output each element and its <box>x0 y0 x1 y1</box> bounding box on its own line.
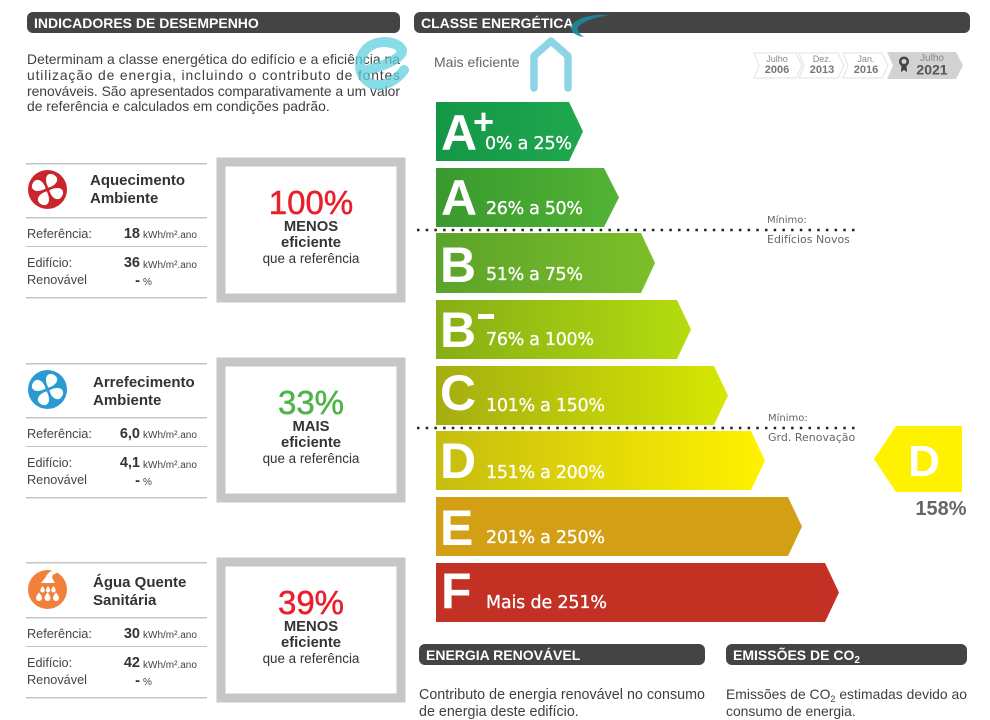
bar: F: F <box>441 563 472 619</box>
panel: arrefecimento ambiente: - <box>135 473 140 489</box>
energy scale bars <box>436 101 839 622</box>
text: energia renovável <box>419 687 705 720</box>
text: emissões de CO2: 2 <box>830 694 835 704</box>
callout: 33% mais eficiente: 33% <box>278 384 344 421</box>
callout: 33% mais eficiente: MAIS <box>292 419 330 435</box>
bar: D: D <box>440 433 476 489</box>
callout: 100% menos eficiente: que a referência <box>263 251 360 266</box>
callout: 33% mais eficiente: eficiente <box>281 435 341 451</box>
panel: água quente sanitária: Água Quente <box>93 574 186 591</box>
label: mínimo grd. renovação: Grd. Renovação <box>768 431 855 444</box>
panel: aquecimento ambiente: Ambiente <box>90 190 158 207</box>
bar: E: 201% a 250% <box>486 528 605 548</box>
panel: água quente sanitária: kWh/m².ano <box>143 660 197 671</box>
bar: B-: 76% a 100% <box>486 330 594 350</box>
callout: 100% menos eficiente: MENOS <box>284 219 338 235</box>
heading: emissões de CO2: EMISSÕES DE CO <box>733 647 854 663</box>
bar: A+: A <box>441 105 477 161</box>
panel: aquecimento ambiente: Edifício: <box>27 256 72 270</box>
icon: red fan <box>28 170 67 209</box>
panel: água quente sanitária: Renovável <box>27 673 87 687</box>
panel: aquecimento ambiente: Referência: <box>27 227 92 241</box>
callout: 100% menos eficiente <box>221 162 401 298</box>
heading: emissões de CO2: 2 <box>854 655 860 666</box>
panel: água quente sanitária <box>26 562 207 698</box>
panel: aquecimento ambiente: - <box>135 273 140 289</box>
watermark: house outline <box>534 41 568 88</box>
callout: 39% menos eficiente: 39% <box>278 584 344 621</box>
panel: aquecimento ambiente: Aquecimento <box>90 172 185 189</box>
bar: A+ <box>436 101 583 161</box>
label: mais eficiente: Mais eficiente <box>434 54 520 70</box>
heading: energia renovável <box>419 644 705 665</box>
panel: arrefecimento ambiente: Renovável <box>27 473 87 487</box>
panel: água quente sanitária: Edifício: <box>27 656 72 670</box>
bar: A: A <box>441 170 477 226</box>
panel: aquecimento ambiente: 18 <box>124 226 140 242</box>
bar: B-: B <box>440 302 476 358</box>
text: energia renovável: de energia deste edifício. <box>419 704 579 720</box>
bar: B: 51% a 75% <box>486 265 583 285</box>
timeline step: julho 2021 current: 2021 <box>916 62 948 78</box>
watermark: teal swoosh <box>571 15 610 37</box>
bar: A+: + <box>473 101 494 142</box>
panel: aquecimento ambiente: kWh/m².ano <box>143 230 197 241</box>
panel: água quente sanitária: 30 <box>124 626 140 642</box>
panel: água quente sanitária: kWh/m².ano <box>143 630 197 641</box>
heading: classe energética <box>414 12 970 33</box>
icon: blue fan <box>28 370 67 409</box>
panel: arrefecimento ambiente: 6,0 <box>120 426 140 442</box>
label: mínimo grd. renovação: Mínimo: <box>768 412 808 424</box>
callout: 39% menos eficiente: MENOS <box>284 619 338 635</box>
callout: 39% menos eficiente: que a referência <box>263 651 360 666</box>
label: mínimo grd. renovação <box>768 412 855 444</box>
bar: B- <box>436 300 691 359</box>
panel: arrefecimento ambiente: 4,1 <box>120 455 140 471</box>
timeline step: jan 2016: Jan. <box>857 54 875 64</box>
heading: emissões de CO2 <box>726 644 967 666</box>
bar: D <box>436 431 765 490</box>
panel: aquecimento ambiente: Renovável <box>27 273 87 287</box>
dotted line: mínimo grande renovação <box>417 427 858 429</box>
building class marker: D 158%: D <box>908 437 940 486</box>
icon: orange shower <box>28 570 67 609</box>
panel: aquecimento ambiente: 36 <box>124 255 140 271</box>
panel: aquecimento ambiente <box>26 163 207 298</box>
building class marker: D 158%: 158% <box>915 498 967 520</box>
panel: arrefecimento ambiente: Edifício: <box>27 456 72 470</box>
text: emissões de CO2: estimadas devido ao <box>835 686 967 702</box>
panel: arrefecimento ambiente <box>26 363 207 498</box>
heading: indicadores de desempenho <box>27 12 400 33</box>
bar: E: E <box>440 500 473 556</box>
bar: A <box>436 168 619 227</box>
heading: indicadores de desempenho: INDICADORES DE DESEMPENHO <box>34 15 259 31</box>
text: emissões de CO2: consumo de energia. <box>726 703 856 719</box>
callout: 39% menos eficiente: eficiente <box>281 635 341 651</box>
panel: aquecimento ambiente: kWh/m².ano <box>143 260 197 271</box>
timeline step: julho 2006: 2006 <box>765 64 789 76</box>
intro text: de referência e calculados em condições padrão. <box>27 98 330 114</box>
bar: A+: 0% a 25% <box>485 134 572 154</box>
panel: arrefecimento ambiente: % <box>143 477 152 488</box>
text: energia renovável: Contributo de energia renovável no consumo <box>419 687 705 703</box>
panel: água quente sanitária: Referência: <box>27 627 92 641</box>
timeline step: dez 2013: 2013 <box>810 64 834 76</box>
panel: água quente sanitária: - <box>135 673 140 689</box>
bar: B: B <box>440 237 476 293</box>
panel: água quente sanitária: Sanitária <box>93 592 157 609</box>
panel: arrefecimento ambiente: kWh/m².ano <box>143 430 197 441</box>
timeline of regulation dates <box>754 52 963 79</box>
bar: E <box>436 497 802 556</box>
callout: 39% menos eficiente <box>221 562 401 698</box>
bar: C: 101% a 150% <box>486 396 605 416</box>
timeline step: julho 2021 current: Julho <box>920 53 944 64</box>
bar: C: C <box>440 365 476 421</box>
bar: C <box>436 365 728 425</box>
heading: classe energética: CLASSE ENERGÉTICA <box>421 15 573 31</box>
timeline step: dez 2013: Dez. <box>813 54 831 64</box>
building class marker: D 158% <box>874 426 967 520</box>
watermark: cyan letter e <box>360 42 404 85</box>
timeline step: julho 2021 current <box>887 52 963 79</box>
timeline step: jan 2016 <box>843 53 888 78</box>
bar: A: 26% a 50% <box>486 199 583 219</box>
panel: arrefecimento ambiente: Ambiente <box>93 392 161 409</box>
panel: arrefecimento ambiente: Referência: <box>27 427 92 441</box>
bar: F <box>436 563 839 622</box>
panel: aquecimento ambiente: % <box>143 277 152 288</box>
bar: F: Mais de 251% <box>486 593 607 613</box>
label: mínimo edifícios novos: Edifícios Novos <box>767 233 850 246</box>
panel: arrefecimento ambiente: Arrefecimento <box>93 374 195 391</box>
timeline step: jan 2016: 2016 <box>854 64 878 76</box>
heading: energia renovável: ENERGIA RENOVÁVEL <box>426 647 581 663</box>
panel: água quente sanitária: % <box>143 677 152 688</box>
timeline step: dez 2013 <box>799 53 844 78</box>
label: mínimo edifícios novos <box>767 214 850 246</box>
callout: 33% mais eficiente <box>221 362 401 498</box>
bar: D: 151% a 200% <box>486 463 605 483</box>
callout: 33% mais eficiente: que a referência <box>263 451 360 466</box>
intro text: renováveis. São apresentados comparativamente a um valor <box>27 83 400 99</box>
dotted line: mínimo edifícios novos <box>417 229 858 231</box>
text: emissões de CO2 <box>726 686 967 719</box>
panel: arrefecimento ambiente: kWh/m².ano <box>143 460 197 471</box>
intro text: utilização de energia, incluindo o contributo de fontes <box>27 67 400 83</box>
bar: B <box>436 233 655 293</box>
callout: 100% menos eficiente: 100% <box>269 184 353 221</box>
callout: 100% menos eficiente: eficiente <box>281 235 341 251</box>
label: mínimo edifícios novos: Mínimo: <box>767 214 807 226</box>
intro text <box>27 51 400 114</box>
timeline step: julho 2006: Julho <box>766 54 788 64</box>
timeline step: julho 2006 <box>754 53 802 78</box>
intro text: Determinam a classe energética do edifício e a eficiência na <box>27 51 400 67</box>
panel: água quente sanitária: 42 <box>124 655 140 671</box>
text: emissões de CO2: Emissões de CO <box>726 686 830 702</box>
